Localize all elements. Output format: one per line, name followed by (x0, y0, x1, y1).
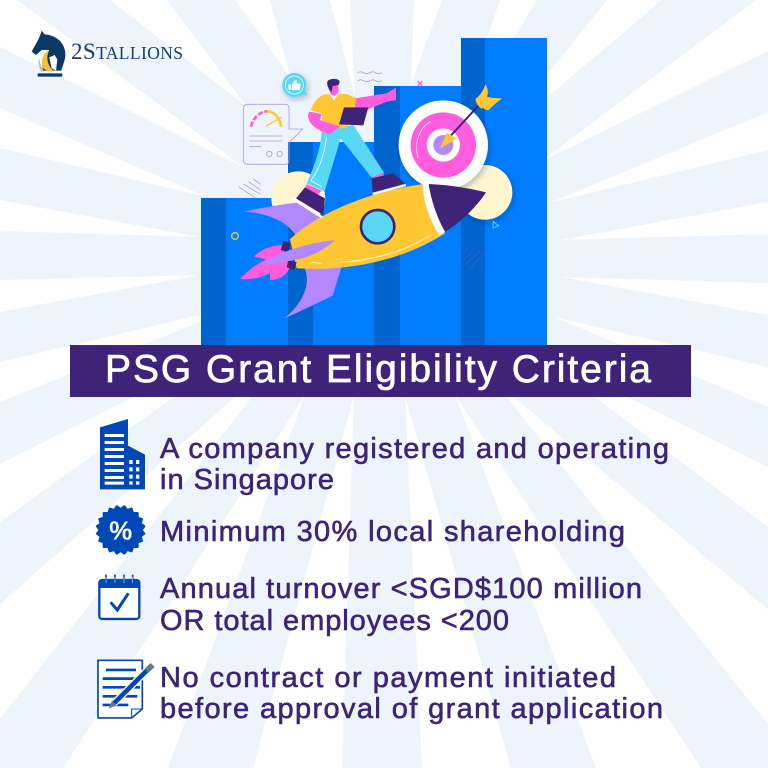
criterion 4: no contract before approval (98, 660, 663, 725)
icon: percent badge (96, 505, 146, 555)
decorations (232, 72, 499, 270)
criterion 3: turnover or employees: OR total employees <200 (160, 605, 509, 637)
criterion 4: no contract before approval: before approval of grant application (160, 693, 663, 725)
criterion 2: local shareholding: Minimum 30% local shareholding (160, 516, 625, 548)
illustration: rocket, person, target (232, 72, 512, 319)
criterion 4: no contract before approval: No contract or payment initiated (160, 662, 616, 694)
icon: rocket (240, 184, 486, 319)
criterion 1: registered company (100, 419, 669, 496)
criterion 1: registered company: A company registered and operating (160, 433, 669, 465)
icon: office building (100, 419, 145, 489)
wordmark: 2STALLIONS (71, 39, 183, 64)
icon: calendar with check (99, 575, 139, 619)
icon: document with pen (98, 660, 153, 718)
icon: person on rocket (293, 79, 406, 218)
icon: cream circles (271, 165, 512, 225)
criterion 2: local shareholding (96, 505, 625, 555)
logo: 2Stallions (32, 31, 183, 77)
criterion 3: turnover or employees: Annual turnover <SGD$100 million (160, 573, 642, 605)
title banner: PSG Grant Eligibility Criteria (105, 348, 651, 391)
icon: thumbs up bubble (282, 73, 307, 97)
criterion 1: registered company: in Singapore (160, 464, 334, 496)
icon: target with arrow (399, 84, 502, 190)
icon: gauge speech bubble (243, 104, 303, 164)
bar chart backdrop (201, 38, 547, 345)
icon: horse chess knight (32, 31, 65, 77)
criterion 3: turnover or employees (99, 573, 642, 637)
icon: percent badge: % (109, 515, 132, 545)
